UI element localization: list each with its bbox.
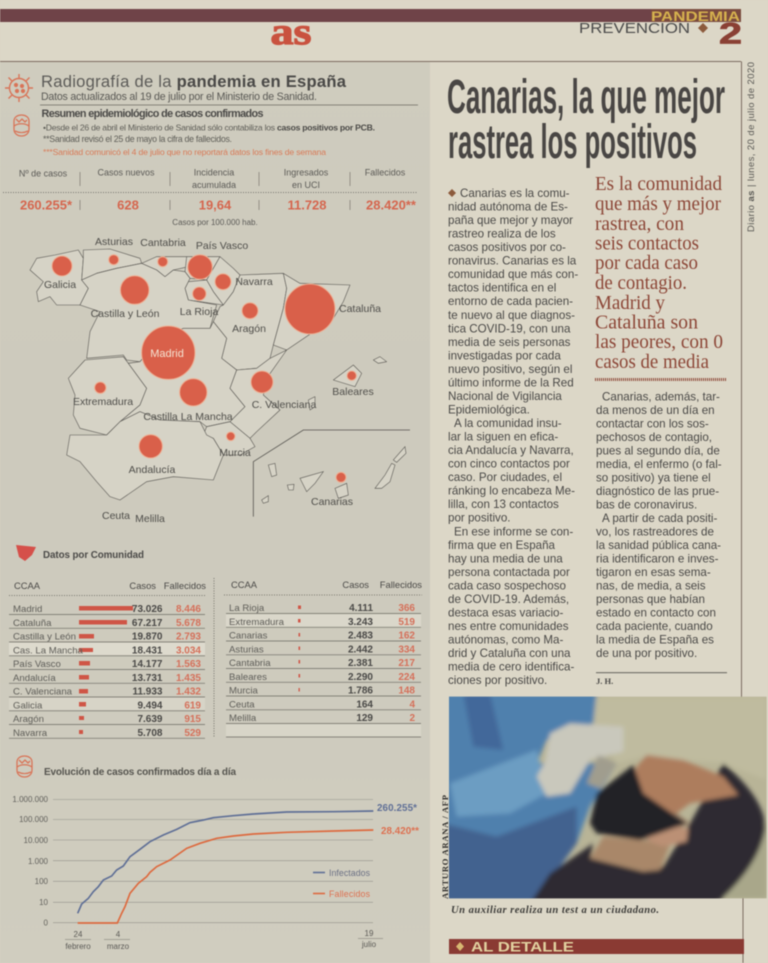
headline [447,71,725,169]
pull quote: de contagio. [595,272,687,294]
panel: key figures [3,168,418,227]
region labels: Canarias [311,496,353,508]
figure values [20,198,417,212]
left infographic background [0,62,430,963]
region outlines [30,249,387,500]
table: left: 5.678 [176,618,201,629]
pull quote: Es la comunidad [595,173,722,195]
region labels: Baleares [332,386,374,398]
column 1 text: destaca esas variacio- [448,606,563,619]
summary notes: •Desde el 26 de abril el Ministerio de Sanidad sólo contabiliza los casos positivos por PCB. [43,122,375,132]
table: left: 1.435 [176,673,201,684]
table: left: 5.708 [137,728,163,739]
gridlines [53,800,373,923]
region labels: Ceuta [102,510,130,522]
table: right: 519 [398,617,415,628]
table: right: 162 [398,630,415,642]
icon: diamond [698,23,708,33]
icon: lead diamond [448,189,456,197]
region labels: Melilla [135,513,165,525]
table: left: País Vasco [13,659,61,670]
heading: Evolución de casos confirmados día a día [44,767,236,778]
column 1 text: tica COVID-19, con una [448,322,571,335]
table: left: 19.870 [132,632,163,642]
column 1 text: nidad autónoma de Es- [448,201,568,214]
table: right: 1.786 [348,686,373,696]
x axis labels [65,929,383,951]
x axis labels: 24 [74,930,83,939]
y axis labels: 0 [44,918,49,928]
figure values: 260.255* [20,198,73,212]
table: left: Fallecidos [164,580,206,591]
column 2 text: estado en contacto con [596,607,716,620]
column 1 text: de COVID-19. Además, [448,593,569,606]
column labels: Nº de casos [19,168,68,178]
column labels: Ingresados [284,168,329,178]
section band: al detalle [449,939,744,954]
column 2 text: pues al segundo día, de [596,445,720,458]
summary notes [43,122,375,157]
table: left: Aragón [13,714,44,725]
column 2 text: A partir de cada positi- [602,512,717,525]
column 1 text: comunidad que más con- [448,268,578,281]
column 1 text: Epidemiológica. [448,403,530,416]
section band: al detalle: AL DETALLE [471,940,574,954]
table: left: C. Valenciana [13,686,73,698]
column labels [19,168,406,190]
region labels: Murcia [219,447,251,459]
byline [596,673,727,686]
column 1 text: A la comunidad insu- [454,417,562,430]
table: right: 164 [356,699,373,710]
panel: infographic header [5,72,418,157]
column 1 text: media de seis personas [448,336,571,349]
column labels: en UCI [292,180,320,190]
table: left: Galicia [13,700,43,711]
column 2 text: contactar con los sos- [596,418,709,431]
icon: mask face [14,115,29,136]
table: left: 619 [184,700,201,711]
table: right: 2.381 [348,658,373,669]
column 1 text: hay una media de una [448,552,563,565]
column 1 text: paña que mejor y mayor [448,214,573,227]
divider [40,104,418,106]
region labels: Castilla y León [91,308,160,320]
column 1 text: con cinco contactos por [448,458,570,471]
table: left: 7.639 [137,714,163,725]
region labels: C. Valenciana [252,399,316,411]
table: left: Madrid [13,604,42,615]
date strip: Diario as | lunes, 20 de julio de 2020 [746,62,757,232]
y axis labels: 1.000 [28,857,49,866]
region labels: Cataluña [339,303,381,315]
x axis labels: marzo [107,942,130,951]
table: left: Cataluña [13,618,52,629]
column 1 text: tactos identifica en el [448,282,556,295]
table: left: CCAA [14,580,41,591]
subtitle: Datos actualizados al 19 de julio por el Ministerio de Sanidad. [41,91,317,103]
figure values: 19,64 [199,198,232,212]
table: left: 13.731 [132,673,163,684]
pull quote: las peores, con 0 [595,331,723,353]
column labels: acumulada [192,180,236,190]
legend: Fallecidos [329,889,371,899]
table: right: 129 [356,713,373,724]
map of Spain [30,236,410,525]
table: left: 915 [184,714,201,725]
pull quote: que más y mejor [595,193,721,215]
legend: Infectados [329,868,371,878]
column 1 text: rastreo realiza de los [448,228,556,241]
column 1 text: autónomas, como Ma- [448,633,563,646]
column 2 text: tigaron en esas sema- [596,566,711,579]
table: right: 334 [398,644,415,655]
table: right: 2 [409,713,415,724]
figure values: 11.728 [287,198,327,212]
column 2 text: da menos de un día en [596,404,715,417]
table: right: 224 [398,672,415,683]
column 1 text: Canarias es la comu- [460,187,570,200]
table: right: Extremadura [229,617,285,628]
column 1 text: Nacional de Vigilancia [448,390,562,403]
column 1 text: cia Andalucía y Navarra, [448,444,574,457]
table: left: Castilla y León [13,632,76,642]
column 1 text: último informe de la Red [448,376,574,389]
table: left: Navarra [13,728,48,739]
column 1 text: nes entre comunidades [448,620,569,633]
page number: 2 [719,18,742,50]
section tag: pandemia: PANDEMIA [651,9,740,24]
pull quote: Madrid y [595,292,665,314]
table: right: Baleares [229,672,267,683]
table: left: Andalucía [13,673,56,684]
column 1 text [448,187,578,687]
photo caption: Un auxiliar realiza un test a un ciudadano. [451,905,659,916]
y axis labels: 100 [35,877,49,886]
column 2 text: la sanidad pública cana- [596,539,721,552]
y axis labels [12,795,49,928]
table: left: Cas. La Mancha [13,645,84,656]
region labels [44,236,381,525]
table: right: Murcia [229,686,258,696]
x axis labels: 19 [365,929,374,938]
bubbles [52,255,356,482]
table: right: 2.290 [348,672,373,683]
table: left: Casos [129,580,156,591]
byline: J. H. [596,676,613,686]
table: right: La Rioja [229,603,265,614]
column 1 text: lar la siguen en efica- [448,431,558,444]
pull quote: rastrea, con [595,213,684,235]
y axis labels: 100.000 [19,815,49,824]
photo: test on a citizen [443,690,767,903]
section: data by community [9,545,422,739]
y axis labels: 1.000.000 [12,795,49,804]
table: right: 4 [409,699,415,710]
table: left: 9.494 [137,700,163,711]
section name: prevención: PREVENCIÓN [579,20,690,37]
y axis labels: 10 [39,898,49,907]
legend [313,868,371,899]
photo credit: ARTURO ARANA / AFP [440,795,450,899]
region labels: Asturias [95,236,133,248]
column 1 text: cada caso sospechoso [448,579,566,592]
column 2 text: Canarias, además, tar- [602,391,720,404]
header band [0,9,742,50]
y axis labels: 10.000 [24,836,49,845]
figure values: 28.420** [366,198,417,212]
column 2 text: vo, los rastreadores de [596,526,714,539]
column 2 text: personas que habían [596,593,705,606]
table: left: 2.793 [176,632,201,642]
column labels: Fallecidos [365,168,406,178]
region labels: Castilla La Mancha [143,411,233,423]
table: left: 1.432 [176,686,201,698]
region labels: Cantabria [140,237,186,249]
incidence note: Casos por 100.000 hab. [172,218,258,227]
column 2 text: de una por positivo. [596,647,697,660]
region labels: Navarra [235,276,273,288]
table: right: 2.483 [348,630,373,642]
column 1 text: caso. Por ciudades, el [448,471,562,484]
column 1 text: lilla, con 13 contactos [448,498,559,511]
table: right: CCAA [231,579,258,590]
table: right: 148 [398,686,415,696]
column 2 text: pechosos de contagio, [596,431,712,444]
summary notes: ***Sanidad comunicó el 4 de julio que no reportará datos los fines de semana [43,147,326,157]
region labels: Aragón [232,323,266,335]
column 1 text: ciones por positivo. [448,674,547,687]
column 1 text: ránking lo encabeza Me- [448,485,575,498]
table: left: 67.217 [132,618,163,629]
table: right: Ceuta [229,699,255,710]
region labels: Galicia [44,279,76,291]
column 1 text: casos positivos por co- [448,241,566,254]
title: Radiografía de la pandemia en España [41,72,347,91]
table: right: 3.243 [348,617,373,628]
table: left: 1.563 [176,659,201,670]
table: right: Canarias [229,630,268,642]
icon: virus [5,74,33,102]
table: left: 11.933 [132,686,163,698]
x axis labels: 4 [116,930,121,939]
column labels: Casos nuevos [97,168,155,178]
icon: red map [16,545,36,561]
region labels: La Rioja [180,306,218,318]
pull quote: por cada caso [595,252,698,274]
region labels: País Vasco [196,240,248,252]
figure values: 628 [117,198,139,212]
line: deaths [78,830,373,923]
icon: mask face [17,756,32,777]
column 2 text: nas, de media, a seis [596,580,706,593]
region labels: Extremadura [73,396,133,408]
table: right: 2.442 [348,644,373,655]
section: line chart [12,756,419,951]
column 1 text: nuevo positivo, según el [448,363,572,376]
column 2 text: la media de España es [596,634,714,647]
table: right: Cantabria [229,658,271,669]
column 2 text: diagnóstico de las prue- [596,485,719,498]
inset: Canary Islands [253,430,410,517]
table: right: 4.111 [349,603,373,614]
column 1 text: En ese informe se con- [454,525,573,538]
column 1 text: persona contactada por [448,566,570,579]
table: left: 73.026 [132,604,163,615]
table: left: 8.446 [176,604,201,615]
column 1 text: drid y Cataluña con una [448,647,571,660]
column 2 text: so positivo) ya tiene el [596,472,711,485]
column 2 text: bas de coronavirus. [596,499,697,512]
end value: deaths: 28.420** [381,826,419,837]
logo: as: as [270,11,312,53]
x axis labels: febrero [65,942,91,951]
column 2 text: media, el enfermo (o fal- [596,458,722,471]
table: right: 366 [398,603,415,614]
pull quote: casos de media [595,351,709,373]
table: left: 3.034 [176,645,201,656]
line: infected [78,811,373,913]
region labels: Madrid [150,348,184,360]
pull quote: seis contactos [595,232,699,254]
summary heading: Resumen epidemiológico de casos confirmados [42,108,264,120]
column 1 text: media de cero identifica- [448,661,574,674]
summary notes: **Sanidad revisó el 25 de mayo la cifra de fallecidos. [43,134,232,144]
column 1 text: por positivo. [448,512,511,525]
pull quote [595,173,727,380]
table: right: Melilla [229,713,257,724]
article [447,62,757,687]
table: right: Asturias [229,644,264,655]
table: right [224,579,422,737]
column 1 text: entorno de cada pacien- [448,295,573,308]
table: left: 529 [184,728,201,739]
table: left [9,580,206,739]
column 1 text: investigadas por cada [448,349,561,362]
column labels: Incidencia [194,168,234,178]
end value: infected: 260.255* [377,803,417,814]
table: right: Casos [342,579,369,590]
table: right: Fallecidos [380,579,422,590]
x axis labels: julio [361,940,377,949]
heading: Datos por Comunidad [43,550,144,561]
column 1 text: te nuevo al que diagnos- [448,309,575,322]
column 2 text: cada paciente, cuando [596,620,713,633]
region labels: Andalucía [129,464,176,476]
column 1 text: firma que en España [448,539,556,552]
column 1 text: ronavirus. Canarias es la [448,255,577,268]
table: right: 217 [398,658,415,669]
pull quote: Cataluña son [595,312,698,334]
column 2 text: ria identificaron e inves- [596,553,719,566]
table: left: 18.431 [132,645,163,656]
table: left: 14.177 [132,659,163,670]
